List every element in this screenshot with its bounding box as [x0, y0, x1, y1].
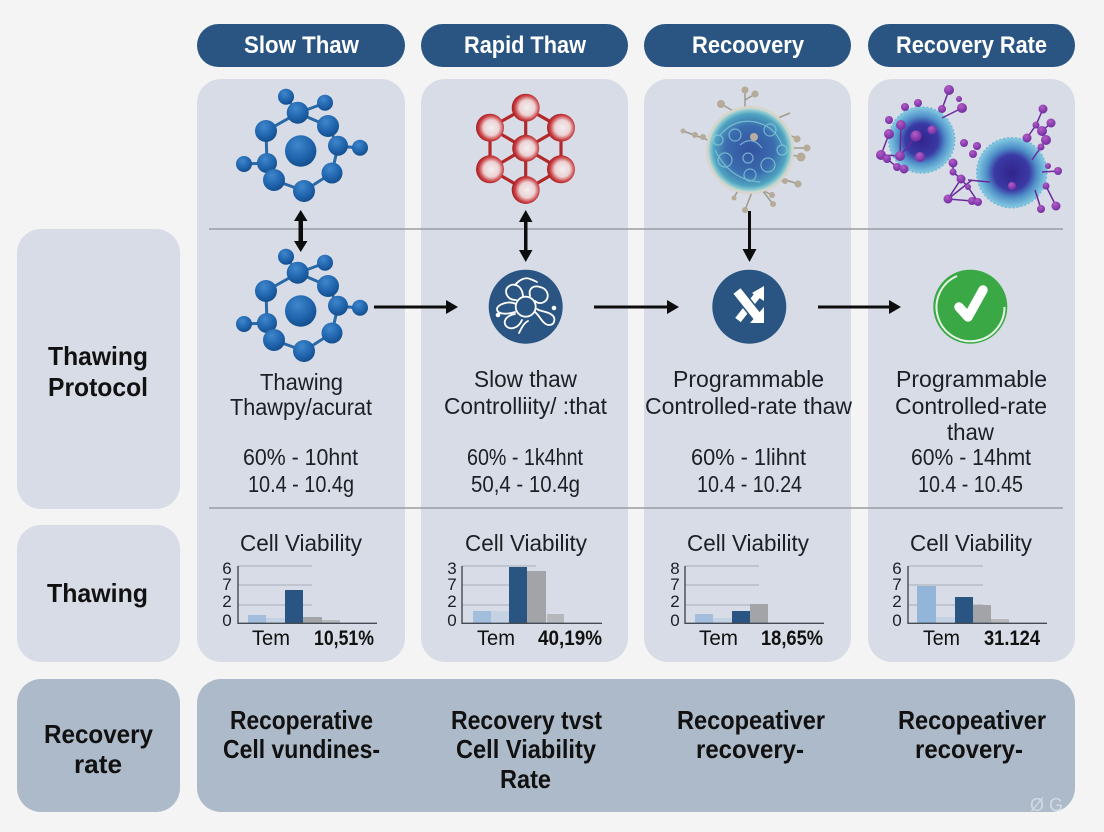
bar chart: recovery rate cell viability: 0 [892, 611, 902, 630]
recovery text: recovery [677, 705, 825, 764]
bar chart: rapid thaw cell viability: 7 [447, 575, 457, 594]
icon: recovering cell [680, 86, 810, 213]
bar chart: slow thaw cell viability: 7 [222, 575, 232, 594]
arrow: recovery vertical [742, 211, 756, 262]
column header: Recovery Rate [868, 24, 1075, 67]
recovery text: rapid thaw [451, 705, 602, 794]
row label: Thawing [17, 525, 180, 662]
bar chart: recovery cell viability: 8 [670, 559, 680, 578]
text block: slow thaw protocol: 10.4 - 10.4g [248, 471, 354, 497]
row label: Thawing: Thawing [47, 578, 148, 608]
bar chart: recovery cell viability: 18,65% [761, 627, 823, 650]
text block: recovery rate protocol: 10.4 - 10.45 [918, 471, 1023, 497]
text block: recovery protocol: 60% - 1lihnt [691, 444, 807, 470]
arrow: rapid thaw to recovery [594, 300, 679, 314]
column header: Recovery: Recoovery [692, 32, 805, 59]
recovery text: recovery rate: recovery- [915, 734, 1023, 764]
recovery text: recovery: Recopeativer [677, 705, 825, 735]
text block: slow thaw protocol: 60% - 10hnt [243, 444, 359, 470]
bar chart: recovery rate cell viability: 7 [892, 575, 902, 594]
bar chart: recovery rate cell viability: 6 [892, 559, 902, 578]
bar chart: recovery cell viability [670, 530, 824, 650]
column header: Recovery [644, 24, 851, 67]
text block: rapid thaw protocol: Controlliity/ :that [444, 393, 608, 419]
bar chart: recovery rate cell viability: Tem [923, 627, 960, 650]
bar chart: slow thaw cell viability: Cell Viability [240, 530, 362, 556]
recovery text: rapid thaw: Recovery tvst [451, 705, 602, 735]
recovery text: slow thaw: Cell vundines- [223, 734, 380, 764]
row label: Thawing Protocol: Thawing [48, 341, 148, 371]
bar chart: rapid thaw cell viability: 40,19% [538, 627, 602, 650]
recovery text: recovery: recovery- [696, 734, 804, 764]
recovery text: rapid thaw: Rate [500, 764, 551, 794]
bar chart: rapid thaw cell viability: Cell Viability [465, 530, 587, 556]
bar chart: recovery cell viability: 7 [670, 575, 680, 594]
bar chart: recovery cell viability: Tem [699, 627, 738, 650]
icon: blue molecule lower [236, 249, 368, 362]
row label: Recovery rate [17, 679, 180, 812]
bar chart: slow thaw cell viability: 6 [222, 559, 232, 578]
text block: slow thaw protocol [230, 369, 373, 497]
bar chart: rapid thaw cell viability [447, 530, 602, 650]
text block: slow thaw protocol: Thawing [260, 369, 343, 395]
bar chart: slow thaw cell viability: 10,51% [314, 627, 374, 650]
icon: green check [933, 270, 1007, 344]
text block: rapid thaw protocol: 60% - 1k4hnt [467, 444, 584, 470]
row label: Recovery rate: Recovery [44, 719, 154, 749]
arrow: slow thaw double vertical [294, 210, 308, 252]
bar chart: recovery cell viability: 0 [670, 611, 680, 630]
column header: Slow Thaw: Slow Thaw [244, 32, 359, 59]
text block: recovery protocol: Programmable [673, 366, 824, 392]
text block: rapid thaw protocol [444, 366, 608, 497]
panel: recovery rate band [197, 679, 1075, 815]
icon: network circuit [489, 270, 563, 344]
bar chart: recovery cell viability: 2 [670, 592, 680, 611]
row label: Thawing Protocol: Protocol [48, 372, 148, 402]
column header: Recovery Rate: Recovery Rate [896, 32, 1047, 59]
column header: Rapid Thaw: Rapid Thaw [464, 32, 586, 59]
panel: rapid thaw column [421, 79, 628, 662]
panel: recovery column [644, 79, 851, 662]
icon: interacting cells [876, 85, 1062, 213]
bar chart: recovery rate cell viability: 2 [892, 592, 902, 611]
text block: recovery rate protocol: Programmable [896, 366, 1047, 392]
icon: blue molecule top [236, 89, 368, 202]
text block: rapid thaw protocol: 50,4 - 10.4g [471, 471, 580, 497]
panel: slow thaw column [197, 79, 405, 662]
bar chart: rapid thaw cell viability: 0 [447, 611, 457, 630]
bar chart: slow thaw cell viability: 2 [222, 592, 232, 611]
bar chart: slow thaw cell viability: Tem [252, 627, 290, 650]
row label: Thawing Protocol [17, 229, 180, 509]
bar chart: rapid thaw cell viability: Tem [477, 627, 515, 650]
arrow: recovery to recovery rate [818, 300, 901, 314]
panel: recovery rate column [868, 79, 1075, 662]
recovery text: recovery rate: Recopeativer [898, 705, 1046, 735]
icon: crossing arrows [712, 270, 786, 344]
bar chart: recovery cell viability: Cell Viability [687, 530, 809, 556]
text block: recovery rate protocol [895, 366, 1047, 497]
text block: slow thaw protocol: Thawpy/acurat [230, 394, 373, 420]
arrow: slow thaw to rapid thaw [374, 300, 458, 314]
recovery text: slow thaw [223, 705, 380, 764]
bar chart: recovery rate cell viability: Cell Viability [910, 530, 1032, 556]
icon: red molecule [476, 94, 575, 204]
watermark: Ø G [1030, 795, 1063, 815]
recovery text: recovery rate [898, 705, 1046, 764]
text block: recovery rate protocol: 60% - 14hmt [911, 444, 1032, 470]
column header: Slow Thaw [197, 24, 405, 67]
text block: rapid thaw protocol: Slow thaw [474, 366, 577, 392]
column header: Rapid Thaw [421, 24, 628, 67]
text block: recovery protocol: 10.4 - 10.24 [697, 471, 802, 497]
text block: recovery rate protocol: thaw [947, 419, 994, 445]
text block: recovery protocol [645, 366, 852, 497]
bar chart: rapid thaw cell viability: 2 [447, 592, 457, 611]
bar chart: slow thaw cell viability: 0 [222, 611, 232, 630]
arrow: rapid thaw double vertical [519, 210, 532, 262]
text block: recovery protocol: Controlled-rate thaw [645, 393, 852, 419]
recovery text: slow thaw: Recoperative [230, 705, 373, 735]
recovery text: rapid thaw: Cell Viability [456, 734, 596, 764]
text block: recovery rate protocol: Controlled-rate [895, 393, 1047, 419]
bar chart: slow thaw cell viability [222, 530, 377, 650]
row label: Recovery rate: rate [74, 749, 122, 779]
bar chart: recovery rate cell viability: 31.124 [984, 627, 1040, 650]
bar chart: recovery rate cell viability [892, 530, 1047, 650]
bar chart: rapid thaw cell viability: 3 [447, 559, 457, 578]
